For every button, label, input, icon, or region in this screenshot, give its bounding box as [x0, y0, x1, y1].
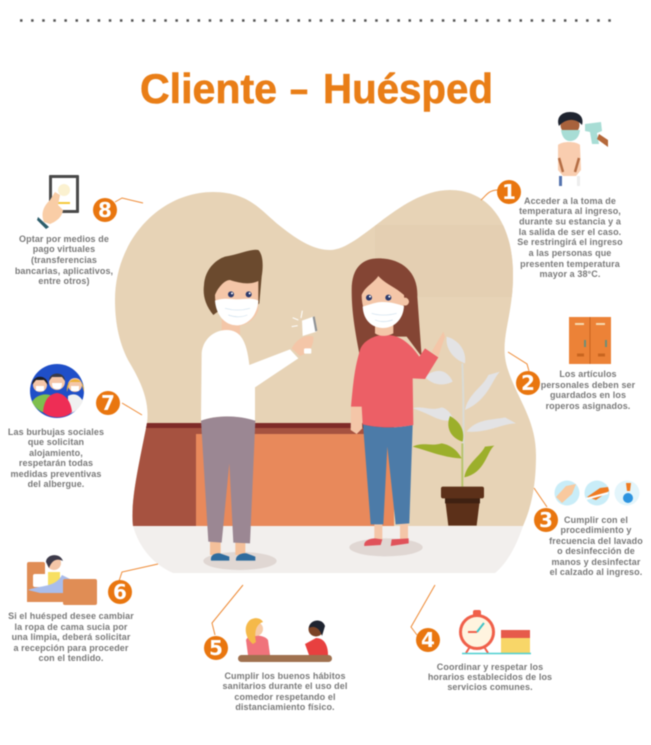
plant	[413, 337, 516, 526]
icon: temperature check	[558, 112, 608, 186]
room background	[100, 180, 550, 576]
title: –	[290, 65, 308, 112]
number badge 4: 4	[421, 628, 435, 652]
central illustration	[100, 180, 550, 576]
title: Cliente	[140, 65, 277, 112]
step 5	[204, 585, 347, 712]
text 7: alojamiento,	[29, 448, 83, 458]
title: Huésped	[323, 65, 493, 112]
text 3: procedimiento y	[560, 525, 632, 535]
text 5: Cumplir los buenos hábitos	[224, 671, 346, 681]
text 3: el calzado al ingreso.	[550, 567, 642, 577]
number badge 2: 2	[521, 371, 535, 395]
text 5: comedor respetando el	[234, 692, 336, 702]
number badge 4	[416, 628, 440, 652]
text 8: entre otros)	[38, 276, 90, 286]
text 1: presenten temperatura	[520, 259, 621, 269]
text 2: guardados en los	[550, 390, 626, 400]
step 3	[534, 480, 643, 577]
text 7: respetarán todas	[19, 458, 93, 468]
number badge 3: 3	[539, 508, 553, 532]
man with thermometer	[201, 250, 317, 570]
step 8	[15, 175, 143, 286]
text 1: mayor a 38°C.	[540, 269, 600, 279]
icon: people at dining table	[238, 618, 332, 662]
text 7: que solicitan	[28, 437, 84, 447]
step 6	[8, 555, 158, 663]
text 3: Cumplir con el	[564, 515, 628, 525]
number badge 5: 5	[209, 636, 223, 660]
text 4: Coordinar y respetar los	[437, 662, 543, 672]
text 1: Se restringirá el ingreso	[517, 237, 623, 247]
text 2: personales deben ser	[541, 380, 636, 390]
icon: tablet payment	[37, 175, 79, 229]
text 1: durante su estancia y a	[519, 216, 622, 226]
text 2: roperos asignados.	[546, 401, 630, 411]
step 2	[508, 317, 636, 411]
text 6: a recepción para proceder	[13, 643, 129, 653]
text 8: bancarias, aplicativos,	[15, 266, 113, 276]
text 1: a las personas que	[529, 248, 611, 258]
icon: clock and calendar	[460, 610, 531, 654]
number badge 6	[108, 580, 132, 604]
text 4: servicios comunes.	[447, 682, 533, 692]
number badge 7: 7	[101, 391, 115, 415]
text 8: pago virtuales	[33, 244, 95, 254]
icon: person in bed	[27, 555, 97, 605]
icon: lockers	[569, 317, 611, 364]
text 7: del albergue.	[28, 479, 84, 489]
icon: social bubble group	[30, 364, 84, 418]
text 7: Las burbujas sociales	[8, 427, 104, 437]
text 7: medidas preventivas	[11, 469, 101, 479]
text 8: (transferencias	[31, 255, 97, 265]
text 3: frecuencia del lavado	[549, 536, 643, 546]
step 7	[8, 364, 142, 489]
number badge 1	[497, 180, 521, 204]
number badge 5	[204, 636, 228, 660]
number badge 6: 6	[113, 580, 127, 604]
text 5: sanitarios durante el uso del	[223, 681, 347, 691]
number badge 8: 8	[98, 198, 112, 222]
step 1	[481, 112, 623, 279]
text 6: con el tendido.	[38, 653, 104, 663]
text 3: o desinfección de	[557, 546, 635, 556]
text 8: Optar por medios de	[19, 234, 109, 244]
title	[140, 65, 493, 112]
text 6: una limpia, deberá solicitar	[12, 632, 131, 642]
text 1: temperatura al ingreso,	[519, 206, 621, 216]
woman	[349, 258, 445, 556]
text 6: Si el huésped desee cambiar	[8, 611, 134, 621]
icon: hand washing and disinfection	[554, 480, 640, 506]
text 2: Los artículos	[559, 369, 617, 379]
text 1: la salida de ser el caso.	[519, 227, 621, 237]
number badge 1: 1	[502, 180, 516, 204]
text 3: manos y desinfectar	[552, 557, 641, 567]
text 5: distanciamiento físico.	[235, 702, 335, 712]
step 4	[411, 585, 552, 692]
text 1: Acceder a la toma de	[524, 196, 616, 206]
text 6: la ropa de cama sucia por	[14, 622, 128, 632]
text 4: horarios establecidos de los	[428, 672, 552, 682]
